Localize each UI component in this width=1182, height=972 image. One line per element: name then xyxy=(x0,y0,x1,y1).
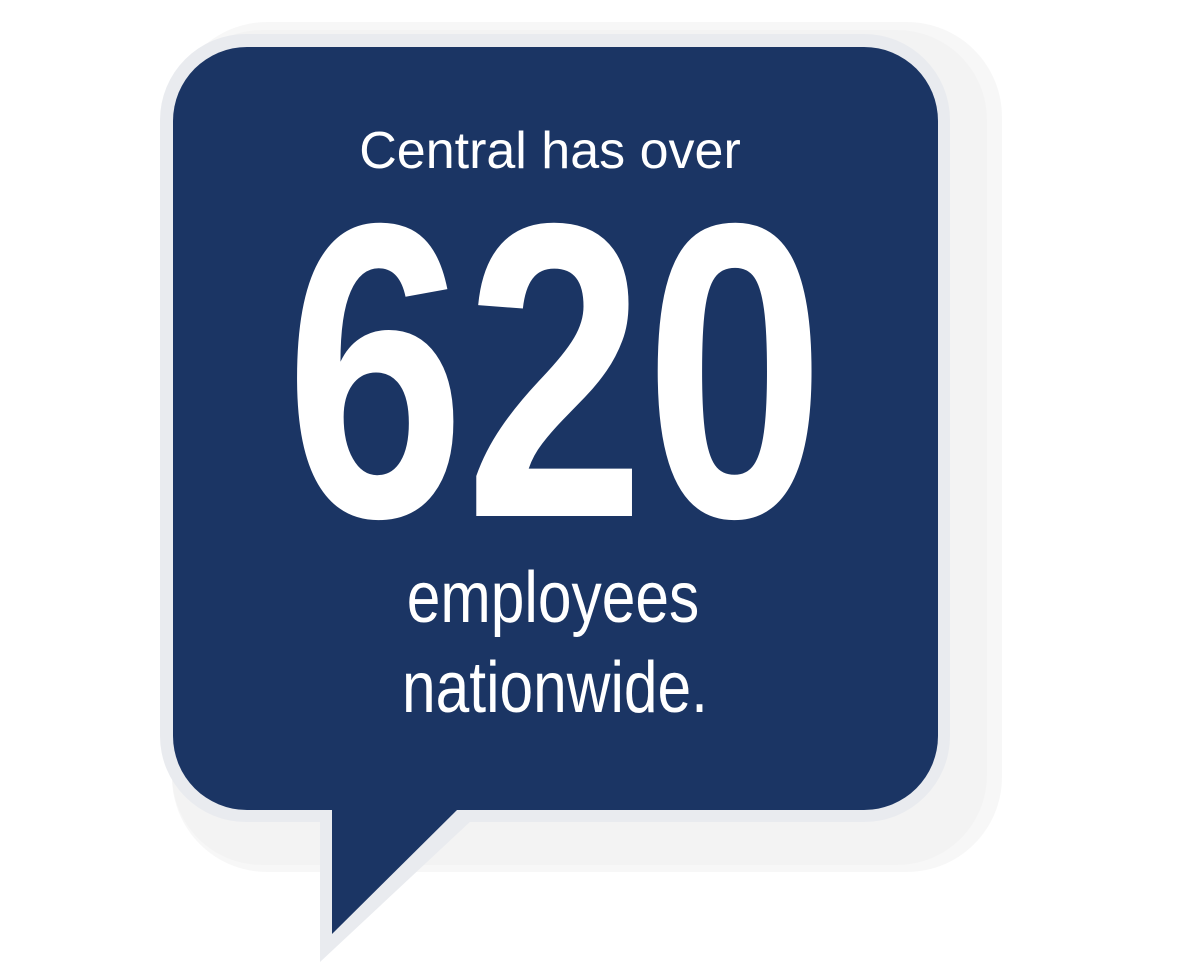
big number 620: 620 xyxy=(285,137,825,606)
intro text: Central has over xyxy=(359,122,741,180)
bubble border xyxy=(160,34,950,962)
text: nationwide: nationwide. xyxy=(402,648,708,728)
bubble body xyxy=(173,47,938,934)
text: employees: employees xyxy=(407,558,699,638)
bubble shadow xyxy=(172,22,1002,872)
